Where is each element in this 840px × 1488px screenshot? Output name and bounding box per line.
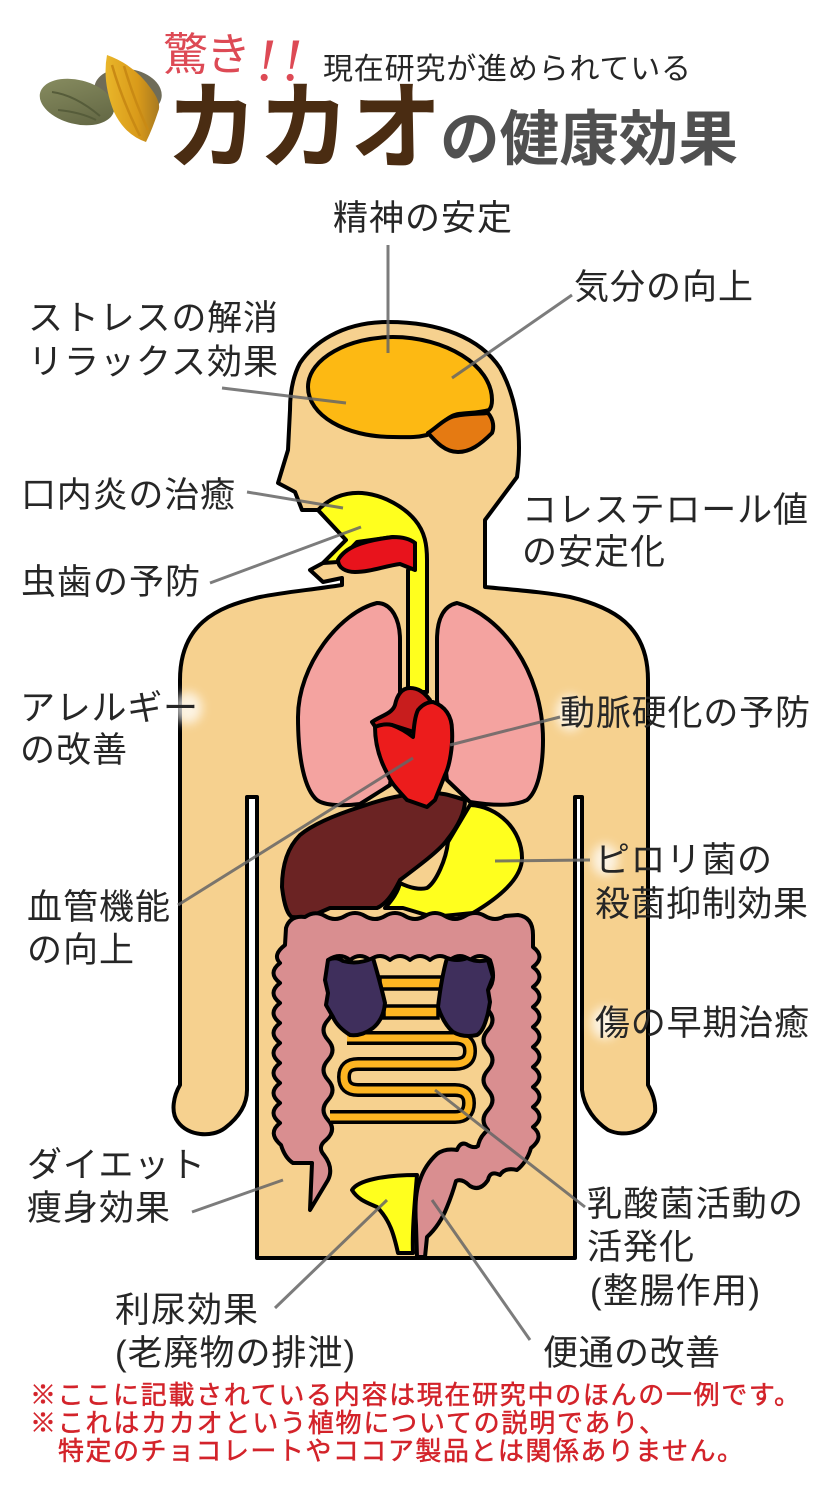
footnote: 特定のチョコレートやココア製品とは関係ありません。 xyxy=(58,1436,743,1466)
label: lactic acid bacteria: (整腸作用) xyxy=(590,1272,760,1311)
label: lactic acid bacteria xyxy=(587,1185,803,1311)
leader line: pylori xyxy=(495,860,590,861)
footnote: ※これはカカオという植物についての説明であり、 xyxy=(30,1408,665,1438)
title block xyxy=(35,27,738,182)
leader line: diuretic xyxy=(275,1200,387,1308)
label: allergy: の改善 xyxy=(20,731,127,770)
icon: cacao pods xyxy=(35,55,165,142)
label: cholesterol: の安定化 xyxy=(522,533,665,572)
label: wound healing: 傷の早期治癒 xyxy=(595,1004,809,1043)
footnote: ※ここに記載されている内容は現在研究中のほんの一例です。 xyxy=(30,1380,800,1410)
leader line: bowel xyxy=(432,1200,530,1340)
organ: small intestine serpentine xyxy=(330,1038,470,1117)
label: pylori: ピロリ菌の xyxy=(595,841,772,880)
organ: liver xyxy=(282,793,465,918)
leader line: stomatitis xyxy=(247,492,343,508)
label: bowel movement: 便通の改善 xyxy=(543,1334,720,1373)
organ: cerebellum xyxy=(428,413,493,452)
heading: surprise xyxy=(163,27,302,93)
label: pylori: 殺菌抑制効果 xyxy=(595,885,808,924)
label: diuretic: 利尿効果 xyxy=(115,1291,258,1330)
organ: left kidney xyxy=(325,958,385,1035)
leader line: cavities xyxy=(210,527,361,583)
label: diet: ダイエット xyxy=(27,1146,205,1185)
leader line: mood xyxy=(452,295,572,378)
label: pylori xyxy=(595,841,808,924)
label: vascular function: の向上 xyxy=(27,931,134,970)
organ: bladder xyxy=(352,1175,417,1253)
leader line: vascular function xyxy=(178,758,413,905)
organ: right kidney xyxy=(438,958,493,1036)
organ: tongue xyxy=(338,537,415,572)
label: allergy xyxy=(20,689,198,770)
heading: cacao: カカオ xyxy=(166,75,442,182)
halos behind labels xyxy=(174,692,619,1039)
organ: stomach xyxy=(385,805,522,917)
label: diet xyxy=(27,1146,205,1228)
label: allergy: アレルギー xyxy=(20,689,198,728)
organ: small intestine upper loops xyxy=(380,977,444,1018)
leader line: lactic acid bacteria xyxy=(435,1090,585,1207)
label: cavities: 虫歯の予防 xyxy=(21,563,200,602)
footnote xyxy=(30,1380,800,1466)
body silhouette xyxy=(174,322,655,1258)
label: stress relief xyxy=(28,299,278,382)
leader line: stress xyxy=(222,388,346,403)
label: stress relief: リラックス効果 xyxy=(28,343,278,382)
leader line: arteriosclerosis xyxy=(450,717,560,745)
label: diet: 痩身効果 xyxy=(27,1189,170,1228)
heading: subtitle: 現在研究が進められている xyxy=(323,53,691,86)
label: cholesterol xyxy=(522,491,808,572)
leader line: mental stability xyxy=(386,245,390,353)
label: cholesterol: コレステロール値 xyxy=(522,491,808,530)
label: vascular function xyxy=(27,888,170,970)
heading: surprise: !! xyxy=(256,27,302,93)
label: lactic acid bacteria: 活発化 xyxy=(587,1228,694,1267)
organ: brain cerebrum xyxy=(308,337,492,437)
label: diuretic: (老廃物の排泄) xyxy=(115,1334,355,1373)
label: diuretic xyxy=(115,1291,355,1373)
label: stress relief: ストレスの解消 xyxy=(28,299,278,338)
organ: throat and oesophagus xyxy=(318,493,427,692)
label: stomatitis: 口内炎の治癒 xyxy=(21,476,235,515)
label: lactic acid bacteria: 乳酸菌活動の xyxy=(587,1185,803,1224)
leader line: diet xyxy=(192,1180,283,1212)
organ: heart xyxy=(375,702,452,807)
organ: colon xyxy=(274,913,540,1257)
label: arteriosclerosis: 動脈硬化の予防 xyxy=(560,694,810,733)
organ: right lung xyxy=(437,603,543,805)
heading: health effects: の健康効果 xyxy=(440,106,738,173)
heading: surprise: 驚き xyxy=(163,29,251,80)
organ: heart aorta xyxy=(372,688,430,733)
label: mental stability: 精神の安定 xyxy=(333,199,512,238)
label: vascular function: 血管機能 xyxy=(27,888,170,927)
label: mood: 気分の向上 xyxy=(574,268,753,307)
organ: left lung xyxy=(298,603,400,805)
